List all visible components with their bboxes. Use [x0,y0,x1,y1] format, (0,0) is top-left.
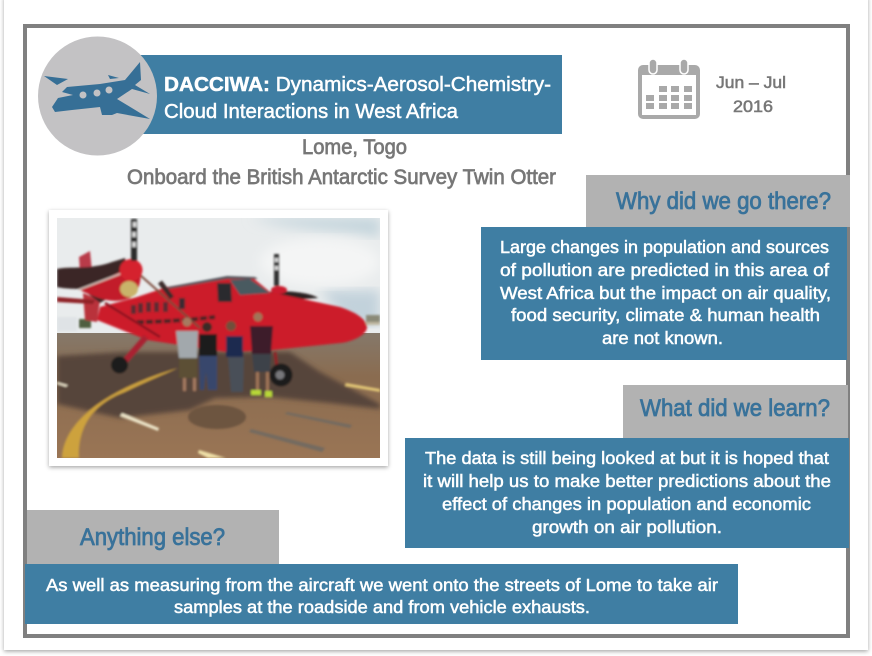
tail [79,251,92,272]
title line one: DACCIWA: Dynamics-Aerosol-Chemistry- [164,73,551,96]
engine and wing [57,258,130,303]
text block: why: West Africa but the impact on air quality, [500,283,831,303]
text block: learn [405,438,849,548]
wing strut [105,303,160,337]
yellow ground line [62,368,178,458]
icon: aeroplane in circle [38,36,157,156]
date text: Jun – Jul [716,73,786,92]
text block: why: Large changes in population and sources [500,237,829,257]
panel: what did we learn [623,385,848,438]
text block: learn: it will help us to make better predictions about the [423,471,831,491]
aircraft text: Onboard the British Antarctic Survey Twin Otter [127,166,556,189]
heading: learn: What did we learn? [640,395,830,422]
location text: Lome, Togo [302,136,407,159]
date text [716,73,786,116]
text block: anything else [25,564,738,624]
text block: why: food security, climate & human health [511,305,820,325]
date text: 2016 [733,97,773,116]
text block: why [481,227,847,360]
text block: why: are not known. [602,328,723,348]
panel: anything else [27,510,279,564]
text block: learn: growth on air pollution. [532,517,722,537]
undercarriage [125,337,146,361]
far propeller [274,254,279,286]
title line two: Cloud Interactions in West Africa [164,100,459,123]
fuselage [97,277,367,352]
text block: anything else: As well as measuring from the aircraft we went onto the streets of Lome to take air [46,575,718,595]
heading: why: Why did we go there? [616,188,831,215]
icon: calendar [638,59,700,119]
photo: team in front of the red aircraft [49,210,388,466]
heading: anything else: Anything else? [80,524,225,551]
text block: anything else: samples at the roadside and from vehicle exhausts. [174,597,590,617]
text block: learn: effect of changes in population and economic [442,494,811,514]
people [182,318,192,326]
text block: learn: The data is still being looked at but it is hoped that [425,448,829,468]
shadow on ground [57,352,380,418]
panel: why did we go there [586,175,850,227]
title banner [140,55,562,134]
text block: why: of pollution are predicted in this area of [500,260,829,280]
